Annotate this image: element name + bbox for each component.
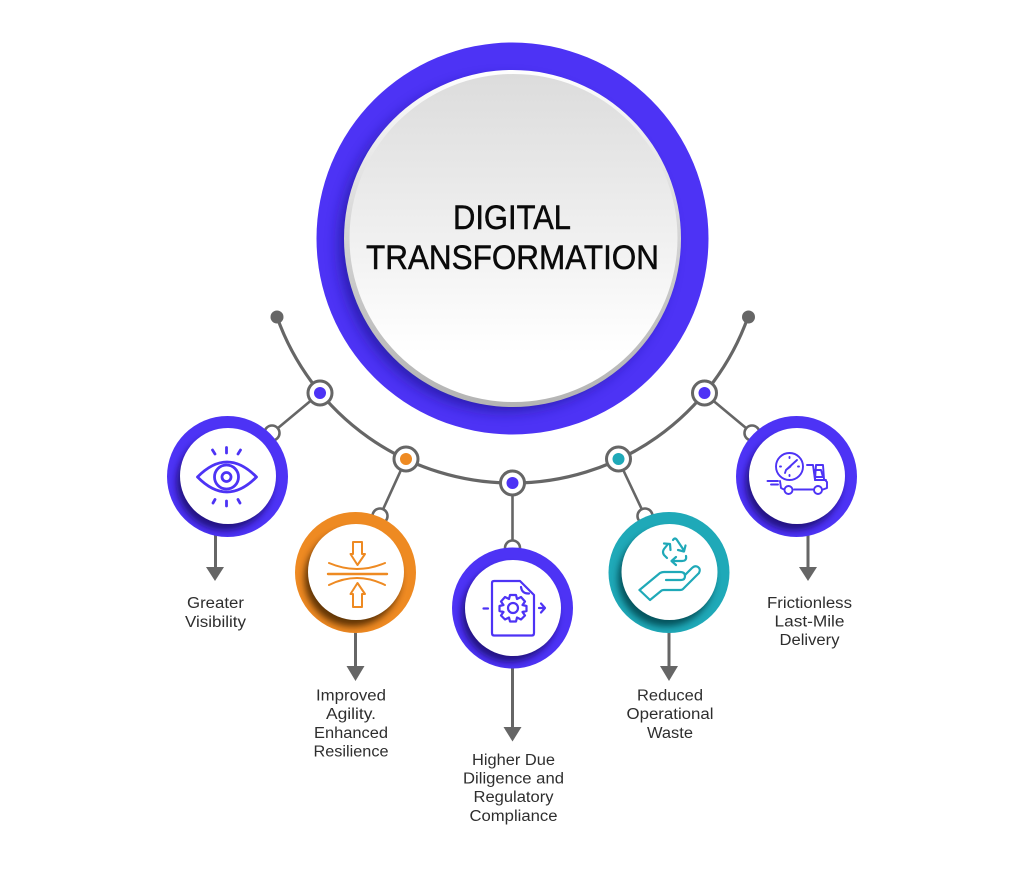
label (626, 688, 714, 742)
label: Operational (626, 706, 714, 723)
title: TRANSFORMATION (366, 239, 659, 277)
label: Compliance (470, 808, 558, 825)
label: Frictionless (767, 595, 852, 612)
label: Waste (647, 725, 693, 742)
central circle (316, 42, 708, 434)
title: DIGITAL (453, 199, 571, 237)
arc node dots (308, 381, 716, 495)
icon: document with gear (484, 581, 545, 636)
icon: eye (198, 448, 256, 506)
label: Improved (316, 688, 386, 705)
label: Higher Due (472, 752, 555, 769)
label (463, 752, 564, 825)
label (767, 595, 852, 649)
curved connector arc (270, 310, 755, 483)
label: Agility. (326, 706, 376, 723)
label: Reduced (637, 688, 703, 705)
item: Greater Visibility (167, 416, 288, 631)
label (185, 595, 246, 631)
icon: delivery truck with clock (768, 453, 827, 494)
branch connectors (264, 393, 760, 556)
item: Higher Due Diligence (452, 548, 573, 825)
icon: hand with recycle arrows (640, 538, 700, 600)
label: Visibility (185, 614, 246, 631)
label: Regulatory (474, 789, 554, 806)
item: Improved Agility (295, 512, 416, 761)
label: Resilience (314, 744, 388, 761)
label (314, 688, 388, 761)
label: Delivery (780, 632, 840, 649)
label: Greater (187, 595, 244, 612)
label: Last-Mile (774, 614, 844, 631)
icon: compression arrows (328, 542, 387, 607)
label: Diligence and (463, 771, 564, 788)
label: Enhanced (314, 725, 388, 742)
item: Reduced Operational Waste (608, 512, 730, 742)
title (366, 199, 659, 277)
item: Frictionless Last-Mile Delivery (736, 416, 857, 649)
